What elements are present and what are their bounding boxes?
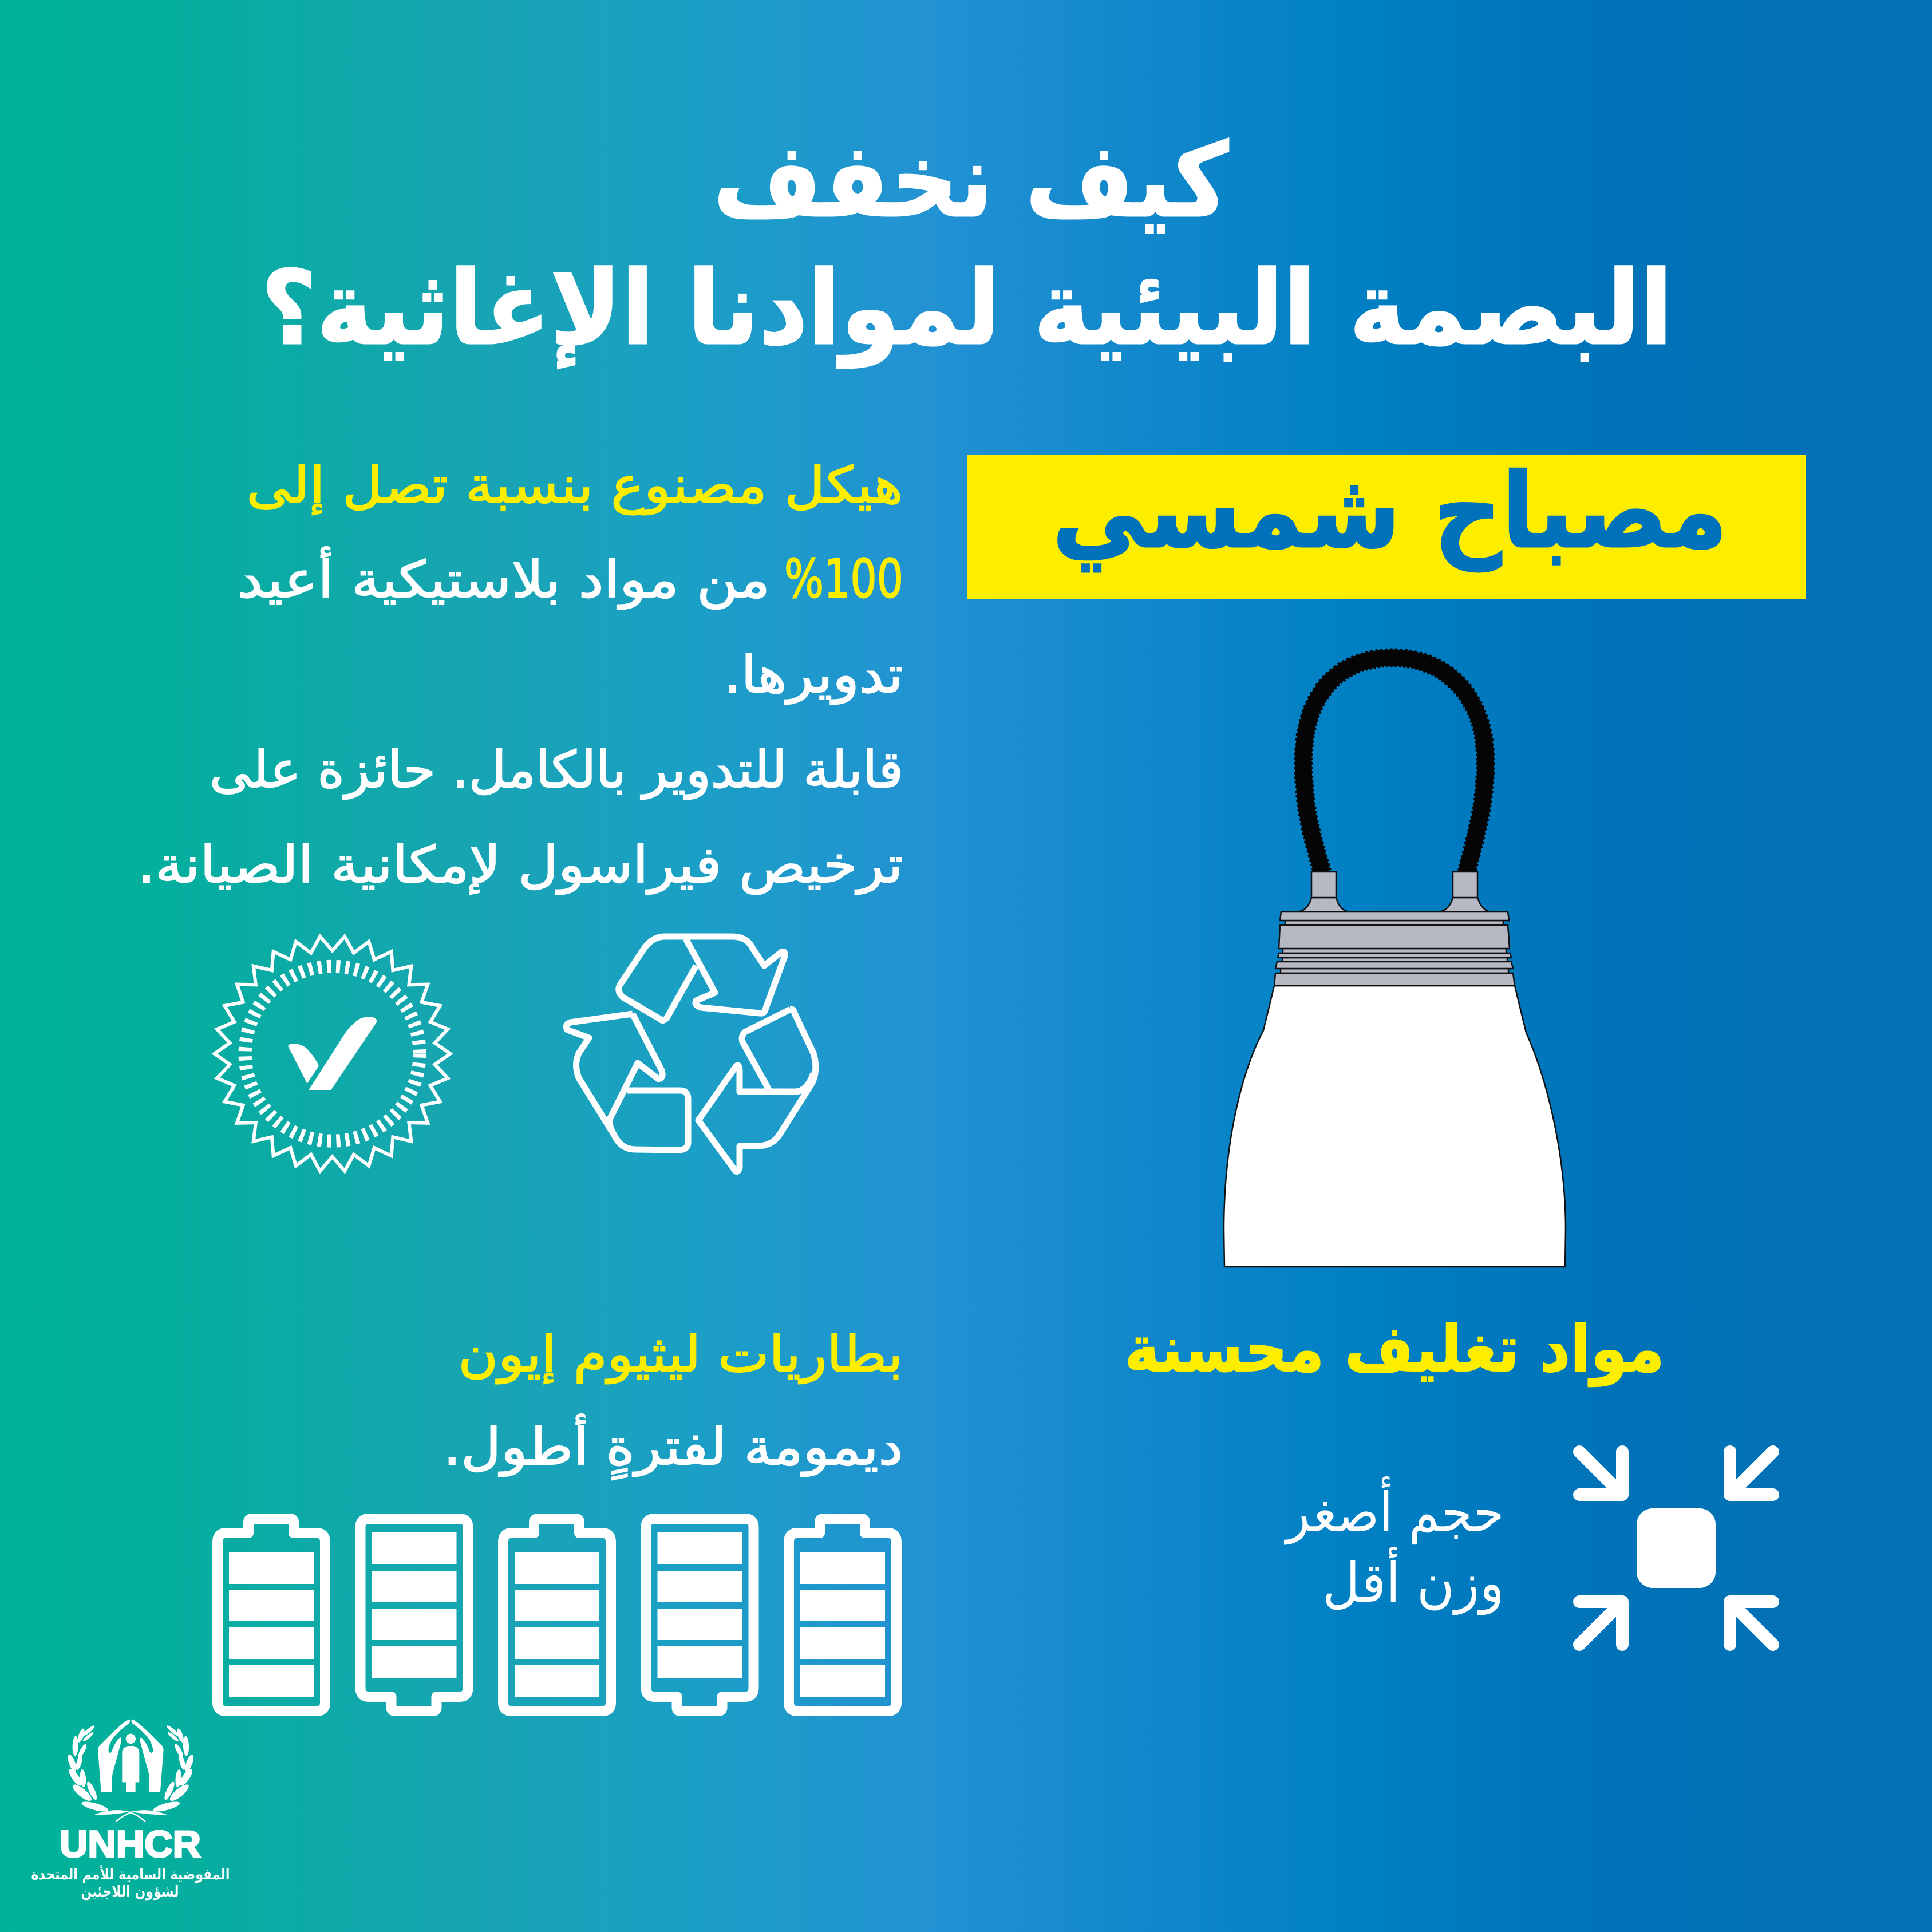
badge tick ring xyxy=(245,966,420,1141)
battery 1 xyxy=(218,1519,325,1711)
icon: verified badge xyxy=(215,937,451,1171)
text block: recycled plastic body: من مواد بلاستيكية أعيد xyxy=(238,547,770,610)
logo wreath left xyxy=(66,1724,133,1822)
text: lithium ion batteries: بطاريات ليثيوم إيون xyxy=(458,1325,903,1384)
battery 3 xyxy=(503,1519,611,1711)
lamp collar xyxy=(1274,872,1515,986)
logo: UNHCR xyxy=(31,1719,230,1901)
icon: compress arrows xyxy=(1579,1452,1773,1645)
title: كيف نخفف xyxy=(713,121,1228,240)
text block: recycled plastic body: هيكل مصنوع بنسبة تصل إلى xyxy=(246,456,903,515)
text block: recycled plastic body: تدويرها. xyxy=(724,645,903,705)
text: smaller and lighter xyxy=(1284,1476,1504,1615)
text: lithium ion batteries: ديمومة لفترةٍ أطول. xyxy=(443,1414,903,1480)
compress centre square xyxy=(1637,1508,1716,1588)
badge serrated border xyxy=(215,937,451,1171)
text: smaller and lighter: حجم أصغر xyxy=(1284,1476,1504,1545)
badge check mark xyxy=(288,1017,377,1090)
title xyxy=(261,121,1673,369)
lamp body xyxy=(1224,986,1566,1267)
text block: recycled plastic body: %100 xyxy=(784,548,903,610)
icon: recycling symbol xyxy=(566,937,816,1172)
icon: row of batteries xyxy=(218,1519,896,1711)
text: smaller and lighter: وزن أقل xyxy=(1322,1547,1504,1615)
text block: recycled plastic body: ترخيص فيراسول لإمكانية الصيانة. xyxy=(137,835,903,895)
logo arabic name xyxy=(31,1865,230,1901)
battery 4 xyxy=(646,1519,753,1711)
text: improved packaging: مواد تغليف محسنة xyxy=(1124,1312,1665,1386)
logo wreath right xyxy=(129,1724,195,1822)
panel: solar lamp heading: مصباح شمسي xyxy=(1052,452,1728,572)
text block: recycled plastic body xyxy=(137,456,903,895)
lamp handle xyxy=(1303,658,1485,872)
logo emblem xyxy=(66,1719,195,1822)
compress four arrows xyxy=(1579,1452,1773,1645)
icon: solar lamp xyxy=(1224,658,1566,1267)
logo arabic name: لشؤون اللاجئين xyxy=(81,1883,179,1901)
text: lithium ion batteries xyxy=(443,1325,903,1480)
battery 2 xyxy=(361,1519,468,1711)
battery 5 xyxy=(789,1519,896,1711)
logo wordmark: UNHCR xyxy=(60,1823,201,1865)
title: البصمة البيئية لموادنا الإغاثية؟ xyxy=(261,249,1673,369)
text block: recycled plastic body: قابلة للتدوير بالكامل. حائزة على xyxy=(210,740,903,800)
logo arabic name: المفوضية السامية للأمم المتحدة xyxy=(31,1865,230,1883)
